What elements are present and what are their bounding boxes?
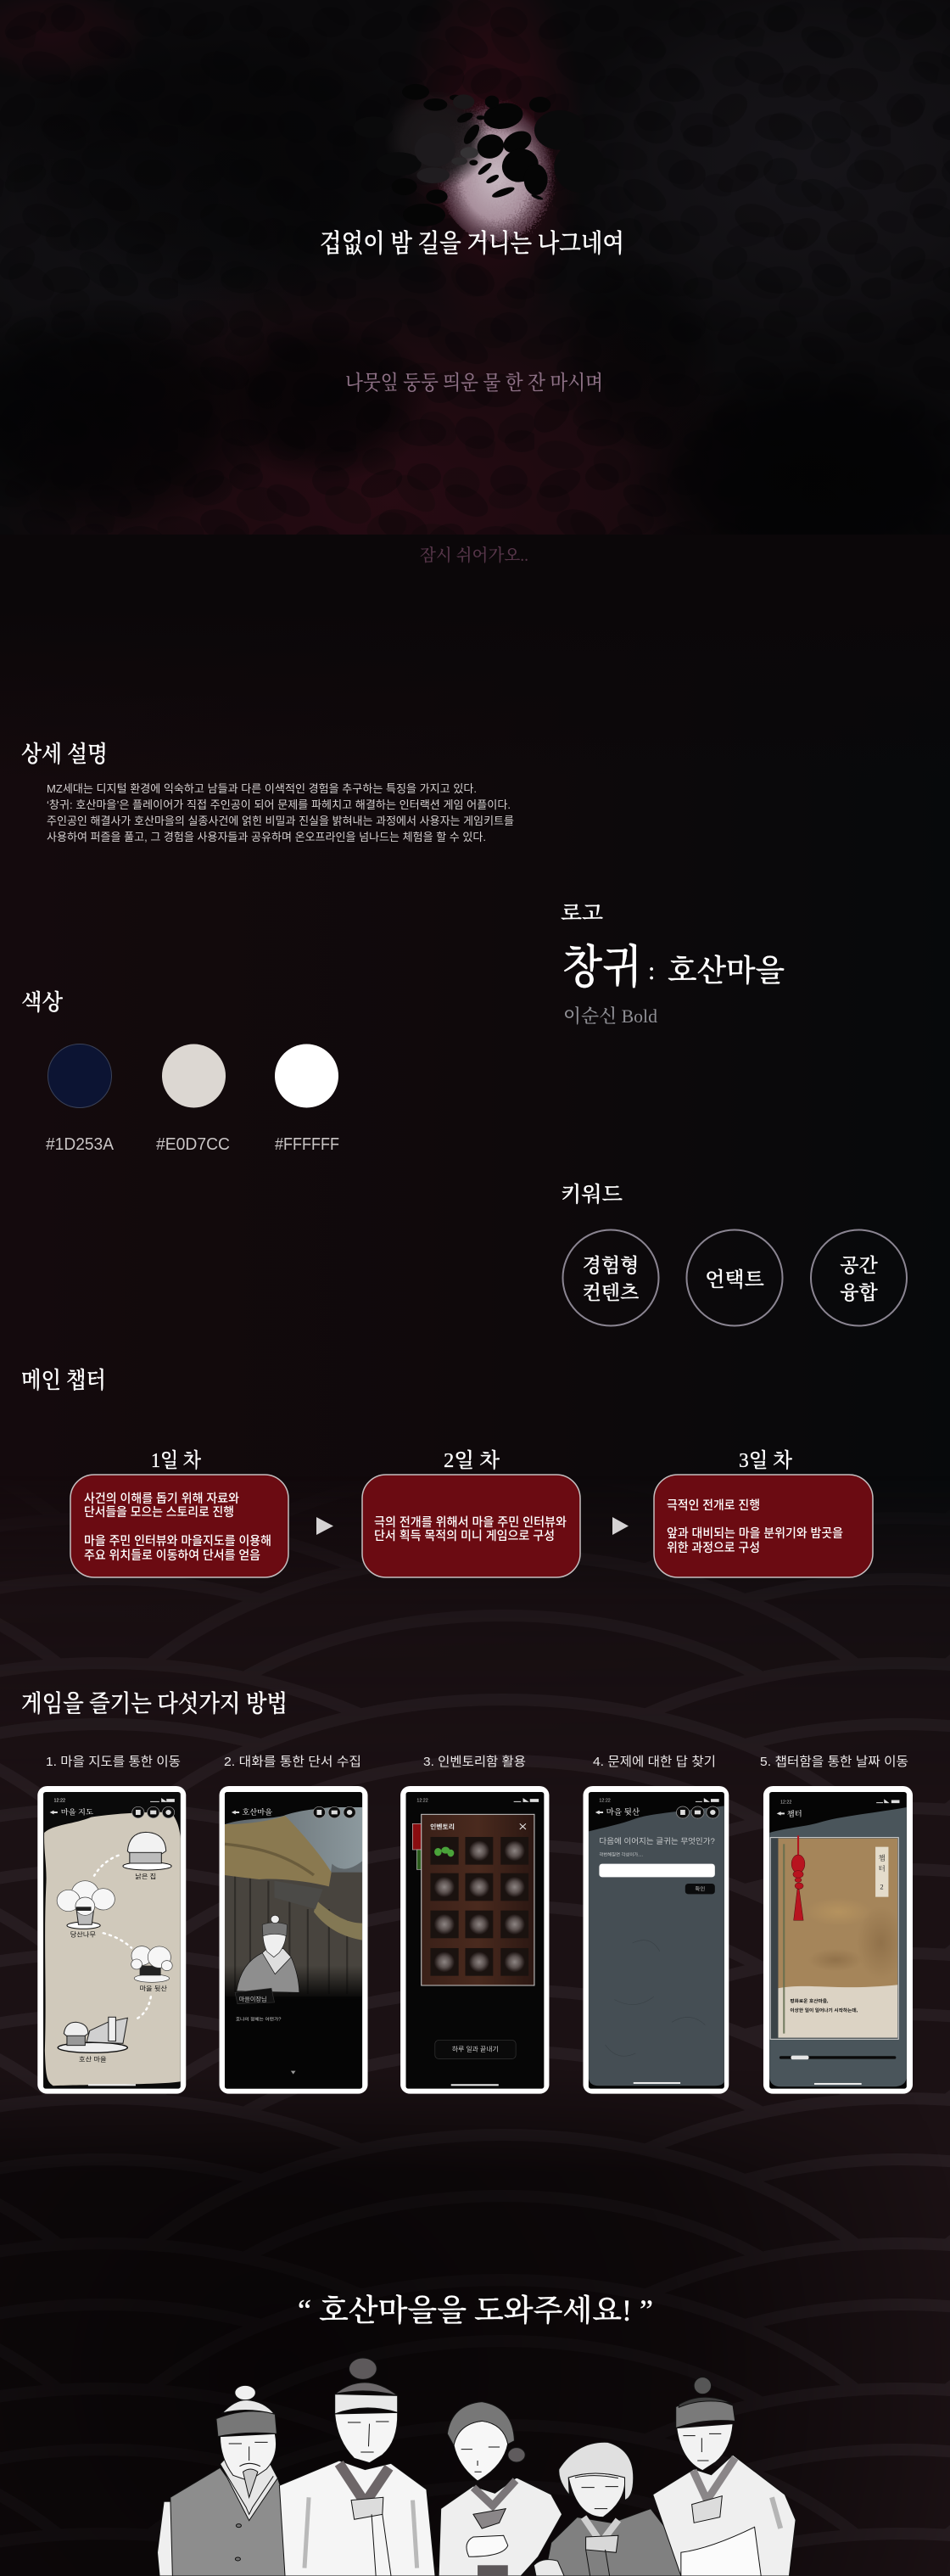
keyword circle: space fusion: 융합 [840, 1282, 878, 1303]
villagers illustration [158, 2358, 796, 2576]
villager: elder in vest [157, 2385, 285, 2576]
phone 2: dialogue: 호나의 정체는 어떤가? [236, 2016, 281, 2023]
phone 4: riddle answer: 12:22 [599, 1798, 611, 1803]
heading: logo: 로고 [561, 903, 603, 925]
chapter day 3: 위한 과정으로 구성 [667, 1541, 760, 1555]
logo wordmark: 호산마을 [668, 954, 785, 988]
method labels: 3. 인벤토리함 활용 [423, 1755, 526, 1769]
chapter day 2: 극의 전개를 위해서 마을 주민 인터뷰와 [374, 1515, 567, 1530]
color code labels: #FFFFFF [275, 1135, 339, 1154]
chapter day 3: 앞과 대비되는 마을 분위기와 밤곳을 [667, 1526, 843, 1541]
method labels: 2. 대화를 통한 단서 수집 [224, 1755, 361, 1769]
moon behind leaves [354, 84, 605, 242]
phone 4: riddle answer: 곽번해칠면 각성이가.... [599, 1851, 643, 1858]
chapter day 1: 1일 차 [151, 1449, 202, 1472]
keyword circle: space fusion: 공간 [840, 1255, 878, 1276]
phone 3: inventory: 12:22 [416, 1798, 428, 1803]
method labels: 4. 문제에 대한 답 찾기 [593, 1755, 716, 1769]
chapter day 1: 단서들을 모으는 스토리로 진행 [84, 1505, 234, 1520]
chapter day 2: 단서 획득 목적의 미니 게임으로 구성 [374, 1529, 555, 1543]
detail description paragraph [47, 782, 514, 843]
villager: tall man [279, 2358, 435, 2576]
phone 3: inventory: 인벤토리 [430, 1823, 455, 1830]
phone 5: chapter box: 터 [878, 1864, 886, 1873]
phone 4: riddle answer [583, 1786, 729, 2094]
villager: young man with hat [653, 2377, 796, 2576]
phone 5: chapter box [763, 1786, 913, 2094]
chapter day 1: 주요 위치들로 이동하여 단서를 얻음 [84, 1548, 260, 1563]
phone 1: village map: 호산 마을 [79, 2055, 107, 2063]
closing quote: “ 호산마을을 도와주세요! ” [298, 2293, 653, 2327]
logo font name: 이순신 Bold [563, 1005, 657, 1027]
phone 1: village map: 마을 지도 [61, 1807, 93, 1817]
arrow: day 1 to day 2 [316, 1517, 333, 1535]
arrow: day 2 to day 3 [612, 1517, 629, 1535]
phone 1: village map: 낡은 집 [135, 1872, 156, 1880]
phone 5: chapter box: 챕터 [787, 1809, 802, 1817]
keyword circle: experiential content: 경험형 [583, 1255, 639, 1276]
phone 2: dialogue [220, 1786, 368, 2094]
detail description paragraph: 주인공인 해결사가 호산마을의 실종사건에 얽힌 비밀과 진실을 밝혀내는 과정에서 사용자는 게임키트를 [47, 815, 514, 827]
heading: detail description: 상세 설명 [21, 742, 108, 767]
logo wordmark: 창귀 [562, 942, 642, 993]
keyword circle: experiential content [563, 1230, 658, 1325]
keyword circle: untact: 언택트 [705, 1268, 764, 1291]
villager: old woman [534, 2442, 681, 2576]
phone 4: riddle answer: 확인 [695, 1886, 706, 1892]
rest line: 잠시 쉬어가오.. [420, 546, 528, 565]
phone 5: chapter box: 평화로운 호산마을, [790, 1997, 829, 2004]
phone 1: village map: 12:22 [54, 1798, 65, 1803]
title line: 겁없이 밤 길을 거니는 나그네여 [320, 230, 624, 258]
heading: five ways to enjoy: 게임을 즐기는 다섯가지 방법 [21, 1690, 288, 1717]
heading: main chapter: 메인 챕터 [21, 1368, 106, 1393]
chapter day 3: 극적인 전개로 진행 [667, 1498, 760, 1513]
method labels: 1. 마을 지도를 통한 이동 [46, 1755, 181, 1769]
keyword circle: space fusion [811, 1230, 907, 1325]
chapter day 1: 마을 주민 인터뷰와 마을지도를 이용해 [84, 1534, 271, 1548]
phone 1: village map [37, 1786, 186, 2094]
detail description paragraph: ‘창귀: 호산마을’은 플레이어가 직접 주인공이 되어 문제를 파헤치고 해결하는 인터랙션 게임 어플이다. [47, 798, 511, 811]
color swatch: navy [48, 1044, 112, 1108]
detail description paragraph: 사용하여 퍼즐을 풀고, 그 경험을 사용자들과 공유하며 온오프라인을 넘나드는 체험을 할 수 있다. [47, 831, 486, 843]
phone 5: chapter box: 이상한 일이 일어나기 시작하는데, [790, 2007, 858, 2013]
phone 1: village map: 당산나무 [70, 1930, 96, 1939]
keyword circle: experiential content: 컨텐츠 [583, 1282, 639, 1303]
color swatch: beige [162, 1044, 226, 1108]
color code labels [46, 1135, 339, 1154]
chapter day 1 [70, 1449, 288, 1577]
phone 2: dialogue: 호산마을 [242, 1807, 273, 1817]
chapter day 3: 3일 차 [739, 1449, 793, 1472]
phone 1: village map: 마을 뒷산 [139, 1984, 168, 1992]
heading: colors: 색상 [21, 990, 63, 1015]
chapter day 3 [654, 1449, 873, 1577]
color code labels: #E0D7CC [156, 1135, 230, 1154]
phone 3: inventory: 하루 일과 끝내기 [452, 2045, 499, 2053]
heading: keywords: 키워드 [561, 1183, 623, 1207]
chapter day 2 [362, 1449, 580, 1577]
villager: young woman [439, 2402, 562, 2576]
detail description paragraph: MZ세대는 디지털 환경에 익숙하고 남들과 다른 이색적인 경험을 추구하는 특징을 가지고 있다. [47, 782, 477, 795]
phone 5: chapter box: 2 [880, 1884, 884, 1891]
chapter day 2: 2일 차 [444, 1449, 500, 1472]
subtitle line: 나뭇잎 둥둥 띄운 물 한 잔 마시며 [345, 372, 603, 395]
method labels [46, 1755, 908, 1769]
page background [0, 763, 950, 2576]
phone 3: inventory [400, 1786, 549, 2094]
logo wordmark: : [648, 957, 655, 985]
method labels: 5. 챕터함을 통한 날짜 이동 [760, 1755, 908, 1769]
chapter day 1: 사건의 이해를 돕기 위해 자료와 [84, 1492, 239, 1506]
phone 4: riddle answer: 마을 뒷산 [606, 1807, 640, 1817]
phone 4: riddle answer: 다음에 이어지는 글귀는 무엇인가? [599, 1837, 715, 1845]
phone 5: chapter box: 챕 [878, 1854, 886, 1862]
logo wordmark [562, 942, 785, 993]
color swatch: white [275, 1044, 338, 1108]
color code labels: #1D253A [46, 1135, 115, 1154]
hero forest illustration [0, 0, 950, 535]
phone 5: chapter box: 12:22 [780, 1800, 791, 1805]
phone 2: dialogue: 마을이장님 [239, 1996, 267, 2002]
keyword circle: untact [687, 1230, 782, 1325]
